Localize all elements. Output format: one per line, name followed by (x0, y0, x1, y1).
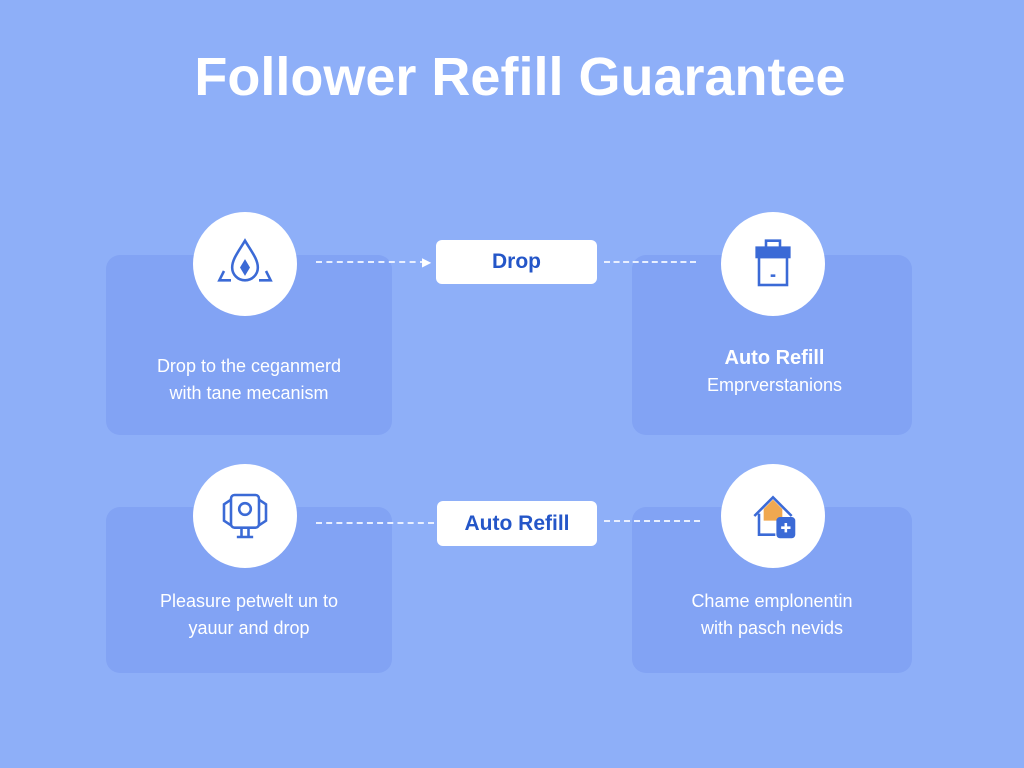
icon: drop (193, 212, 297, 316)
panel: bottom right (632, 507, 912, 673)
pill: auto refill: Auto Refill (464, 512, 570, 534)
arrow: top right (604, 261, 696, 263)
icon: container (721, 212, 825, 316)
text: bottom left: Pleasure petwelt un to (160, 591, 338, 611)
text: top right (707, 347, 842, 395)
text: bottom left: yauur and drop (188, 618, 310, 638)
pill: drop (436, 240, 597, 284)
text: bottom right (691, 591, 853, 638)
icon: house (721, 464, 825, 568)
title: Follower Refill Guarantee (194, 47, 846, 107)
text: top left (157, 356, 341, 403)
pill: auto refill (437, 501, 597, 546)
pill: drop: Drop (492, 250, 541, 273)
text: top left: with tane mecanism (169, 383, 329, 403)
arrow: bottom right (604, 520, 700, 522)
text: bottom right: with pasch nevids (701, 618, 843, 638)
text: bottom left (160, 591, 338, 638)
arrow head: ▶ (422, 255, 431, 269)
text: top right: Auto Refill (724, 347, 824, 369)
text: top right: Emprverstanions (707, 375, 842, 395)
arrow: bottom left (316, 522, 434, 524)
text: top left: Drop to the ceganmerd (157, 356, 341, 376)
text: bottom right: Chame emplonentin (691, 591, 853, 611)
arrow: top left (316, 261, 426, 263)
panel: bottom left (106, 507, 392, 673)
panel: top right (632, 255, 912, 435)
panel: top left (106, 255, 392, 435)
icon: device (193, 464, 297, 568)
